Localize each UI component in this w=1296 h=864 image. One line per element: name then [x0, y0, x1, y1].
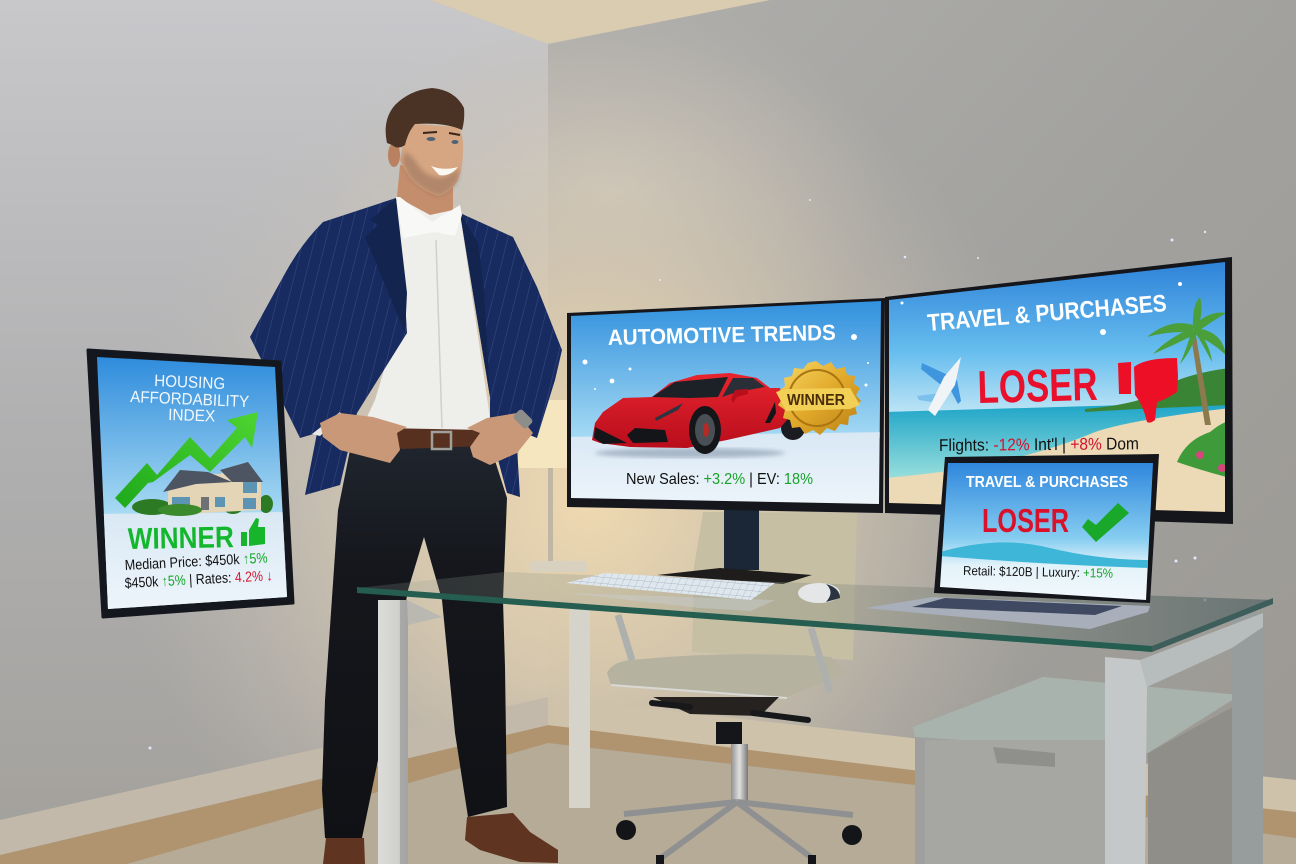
icon: rising green arrow	[115, 412, 258, 508]
back wall	[548, 0, 1296, 830]
stats: rates: $450k ↑5% | Rates: 4.2% ↓	[124, 568, 273, 592]
soft upper wall light	[330, 0, 890, 380]
stats: median price: Median Price: $450k ↑5%	[124, 551, 268, 574]
heading: automotive trends: AUTOMOTIVE TRENDS	[608, 320, 836, 350]
icon: airplane	[917, 357, 961, 416]
monitor stand	[657, 510, 812, 584]
blazer left panel and sleeve	[250, 198, 407, 495]
shoes	[323, 813, 558, 864]
badge: winner medal	[776, 361, 861, 435]
glass desk	[357, 572, 1273, 864]
label: loser: LOSER	[977, 358, 1098, 413]
belt	[378, 428, 484, 449]
heading: housing affordability index: AFFORDABILITY	[130, 388, 249, 411]
blazer right panel and sleeve	[460, 213, 562, 497]
panel: travel and purchases monitor	[885, 257, 1233, 524]
heading: housing affordability index: HOUSING	[154, 372, 226, 393]
trousers	[322, 445, 507, 838]
left wall	[0, 0, 548, 860]
panel: housing affordability tablet	[88, 350, 293, 617]
panel: laptop	[865, 454, 1159, 629]
icon: house	[132, 462, 273, 516]
panel: automotive trends monitor	[565, 298, 885, 513]
office chair	[607, 512, 862, 864]
ceiling	[430, 0, 770, 44]
mouse	[798, 583, 840, 603]
man in navy blazer	[250, 88, 562, 864]
icon: thumbs down	[1118, 358, 1178, 423]
label: winner: WINNER	[128, 521, 234, 556]
stats: flights: Flights: -12% Int'l | +8% Dom	[939, 434, 1139, 455]
icon: red sports car	[592, 373, 805, 458]
watch	[512, 408, 534, 430]
label: loser laptop: LOSER	[982, 502, 1069, 539]
heading: travel and purchases: TRAVEL & PURCHASES	[926, 290, 1168, 337]
floor	[0, 725, 1296, 864]
heading: housing affordability index	[130, 372, 249, 426]
shirt	[360, 197, 492, 432]
icon: thumbs up	[241, 518, 265, 546]
heading: travel and purchases laptop: TRAVEL & PURCHASES	[966, 474, 1128, 491]
heading: housing affordability index: INDEX	[168, 406, 215, 426]
keyboard	[566, 573, 775, 611]
lapels	[365, 198, 490, 397]
sparkles on wall	[148, 199, 1206, 750]
badge: winner medal: WINNER	[787, 392, 845, 409]
head	[386, 88, 464, 238]
stats: new sales and EV: New Sales: +3.2% | EV: 18%	[626, 471, 813, 488]
stats: retail and luxury: Retail: $120B | Luxury: +15%	[963, 563, 1114, 581]
floor lamp	[517, 400, 587, 572]
desk cabinet	[913, 677, 1240, 864]
cuffs and hands	[312, 412, 533, 465]
icon: green check	[1082, 503, 1129, 542]
baseboards	[0, 697, 1296, 855]
